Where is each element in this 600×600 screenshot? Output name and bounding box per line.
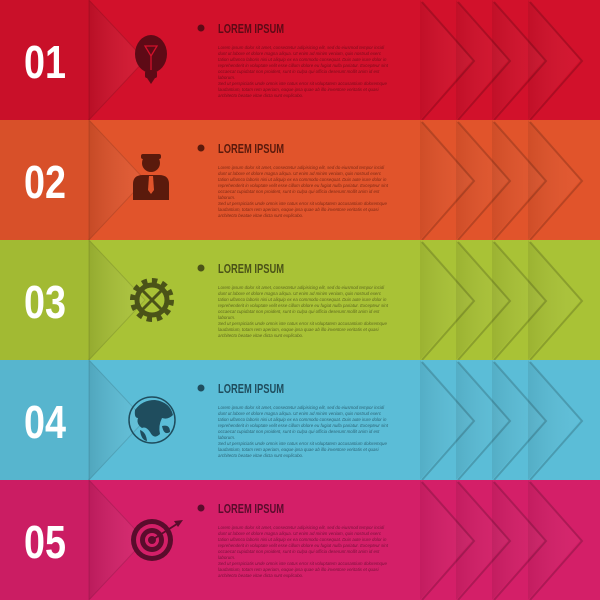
heading: LOREM IPSUM: [218, 501, 284, 516]
heading: [198, 21, 284, 36]
panel: step 04: [0, 360, 600, 480]
text block: [218, 45, 389, 98]
text block: occaecat cupidatat non proident, sunt in culpa qui officia deserunt mollit anim id est: [218, 69, 380, 74]
arrow: left triangle: [89, 120, 145, 240]
panel: step 01: [0, 0, 600, 120]
icon: globe: [129, 397, 175, 443]
text block: laudantium, totam rem aperiam, eaque ipsa quae ab illo inventore veritatis et quasi: [218, 447, 380, 452]
arrow: left triangle: [89, 0, 145, 120]
heading: [198, 501, 284, 516]
text block: Lorem ipsum dolor sit amet, consectetur adipisicing elit, sed do eiusmod tempor incidi: [218, 525, 385, 530]
text block: tation ullamco laboris nisi ut aliquip ex ea commodo consequat. Duis aute irure dolor in: [218, 177, 387, 182]
text block: tation ullamco laboris nisi ut aliquip ex ea commodo consequat. Duis aute irure dolor in: [218, 57, 387, 62]
text block: reprehenderit in voluptate velit esse cillum dolore eu fugiat nulla pariatur. Excepteur sint: [218, 183, 389, 188]
text block: dunt ut labore et dolore magna aliqua. Ut enim ad minim veniam, quis nostrud exerc: [218, 171, 382, 176]
text block: architecto beatae vitae dicta sunt explicabo.: [218, 93, 303, 98]
arrows: chevrons: [420, 240, 582, 360]
text block: tation ullamco laboris nisi ut aliquip ex ea commodo consequat. Duis aute irure dolor in: [218, 537, 387, 542]
text block: reprehenderit in voluptate velit esse cillum dolore eu fugiat nulla pariatur. Excepteur sint: [218, 423, 389, 428]
arrows: chevrons: [420, 0, 582, 120]
text block: reprehenderit in voluptate velit esse cillum dolore eu fugiat nulla pariatur. Excepteur sint: [218, 303, 389, 308]
text block: reprehenderit in voluptate velit esse cillum dolore eu fugiat nulla pariatur. Excepteur sint: [218, 63, 389, 68]
heading: [198, 141, 284, 156]
text block: laborum.: [218, 555, 235, 560]
text block: [218, 525, 389, 578]
heading: [198, 261, 284, 276]
heading: [198, 381, 284, 396]
text block: tation ullamco laboris nisi ut aliquip ex ea commodo consequat. Duis aute irure dolor in: [218, 417, 387, 422]
text block: laborum.: [218, 315, 235, 320]
text block: laudantium, totam rem aperiam, eaque ipsa quae ab illo inventore veritatis et quasi: [218, 87, 380, 92]
arrow: left triangle: [89, 480, 145, 600]
panel: step 02: [0, 120, 600, 240]
heading: LOREM IPSUM: [218, 21, 284, 36]
text block: Lorem ipsum dolor sit amet, consectetur adipisicing elit, sed do eiusmod tempor incidi: [218, 405, 385, 410]
panel: step 05: [0, 480, 600, 600]
text block: occaecat cupidatat non proident, sunt in culpa qui officia deserunt mollit anim id est: [218, 429, 380, 434]
text block: dunt ut labore et dolore magna aliqua. Ut enim ad minim veniam, quis nostrud exerc: [218, 531, 382, 536]
heading: LOREM IPSUM: [218, 381, 284, 396]
text block: laudantium, totam rem aperiam, eaque ipsa quae ab illo inventore veritatis et quasi: [218, 207, 380, 212]
arrow: left triangle: [89, 360, 145, 480]
number 04: 04: [24, 396, 66, 448]
text block: Lorem ipsum dolor sit amet, consectetur adipisicing elit, sed do eiusmod tempor incidi: [218, 165, 385, 170]
text block: tation ullamco laboris nisi ut aliquip ex ea commodo consequat. Duis aute irure dolor in: [218, 297, 387, 302]
text block: Lorem ipsum dolor sit amet, consectetur adipisicing elit, sed do eiusmod tempor incidi: [218, 285, 385, 290]
text block: dunt ut labore et dolore magna aliqua. Ut enim ad minim veniam, quis nostrud exerc: [218, 411, 382, 416]
text block: Sed ut perspiciatis unde omnis iste natus error sit voluptatem accusantium doloremque: [218, 81, 387, 86]
text block: Sed ut perspiciatis unde omnis iste natus error sit voluptatem accusantium doloremque: [218, 201, 387, 206]
text block: Sed ut perspiciatis unde omnis iste natus error sit voluptatem accusantium doloremque: [218, 561, 387, 566]
number 03: 03: [24, 276, 66, 328]
text block: dunt ut labore et dolore magna aliqua. Ut enim ad minim veniam, quis nostrud exerc: [218, 291, 382, 296]
text block: [218, 285, 389, 338]
number 01: 01: [24, 36, 66, 88]
text block: laborum.: [218, 435, 235, 440]
text block: occaecat cupidatat non proident, sunt in culpa qui officia deserunt mollit anim id est: [218, 189, 380, 194]
text block: dunt ut labore et dolore magna aliqua. Ut enim ad minim veniam, quis nostrud exerc: [218, 51, 382, 56]
text block: reprehenderit in voluptate velit esse cillum dolore eu fugiat nulla pariatur. Excepteur sint: [218, 543, 389, 548]
number 02: 02: [24, 156, 66, 208]
text block: architecto beatae vitae dicta sunt explicabo.: [218, 213, 303, 218]
arrows: chevrons: [420, 480, 582, 600]
text block: architecto beatae vitae dicta sunt explicabo.: [218, 333, 303, 338]
text block: Sed ut perspiciatis unde omnis iste natus error sit voluptatem accusantium doloremque: [218, 441, 387, 446]
text block: occaecat cupidatat non proident, sunt in culpa qui officia deserunt mollit anim id est: [218, 549, 380, 554]
text block: laborum.: [218, 195, 235, 200]
icon: gear: [134, 282, 170, 318]
text block: Lorem ipsum dolor sit amet, consectetur adipisicing elit, sed do eiusmod tempor incidi: [218, 45, 385, 50]
icon: target: [131, 519, 183, 561]
arrow: left triangle: [89, 240, 145, 360]
text block: Sed ut perspiciatis unde omnis iste natus error sit voluptatem accusantium doloremque: [218, 321, 387, 326]
arrows: chevrons: [420, 120, 582, 240]
panel: step 03: [0, 240, 600, 360]
text block: architecto beatae vitae dicta sunt explicabo.: [218, 453, 303, 458]
text block: laudantium, totam rem aperiam, eaque ipsa quae ab illo inventore veritatis et quasi: [218, 567, 380, 572]
icon: businessman: [133, 154, 169, 200]
text block: [218, 405, 389, 458]
text block: laudantium, totam rem aperiam, eaque ipsa quae ab illo inventore veritatis et quasi: [218, 327, 380, 332]
heading: LOREM IPSUM: [218, 141, 284, 156]
number 05: 05: [24, 516, 66, 568]
text block: laborum.: [218, 75, 235, 80]
arrows: chevrons: [420, 360, 582, 480]
icon: light bulb: [135, 35, 167, 84]
heading: LOREM IPSUM: [218, 261, 284, 276]
text block: [218, 165, 389, 218]
text block: architecto beatae vitae dicta sunt explicabo.: [218, 573, 303, 578]
text block: occaecat cupidatat non proident, sunt in culpa qui officia deserunt mollit anim id est: [218, 309, 380, 314]
